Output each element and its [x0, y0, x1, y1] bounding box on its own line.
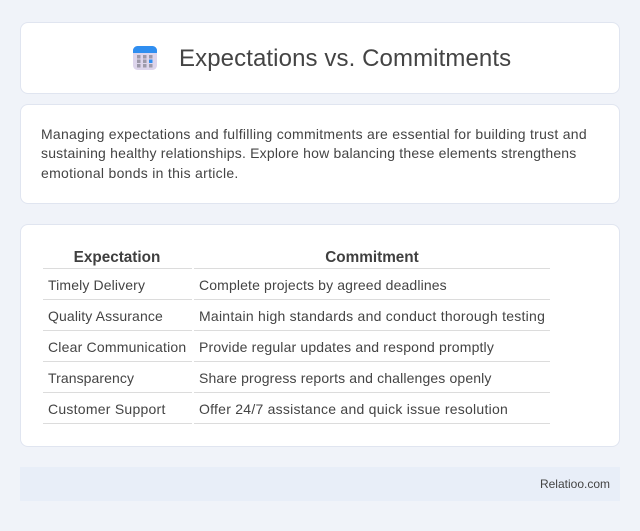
footer bar [20, 467, 620, 501]
row: Clear Communication: Clear Communication [48, 339, 186, 355]
text block: introduction: sustaining healthy relationships. Explore how balancing these elements strengthens [41, 145, 576, 161]
title: Expectations vs. Commitments [179, 45, 511, 72]
row: Quality Assurance: Quality Assurance [48, 308, 163, 324]
row detail: Transparency: Share progress reports and challenges openly [199, 370, 492, 386]
footer credit: Relatioo.com [540, 477, 610, 491]
table header: Commitment: Commitment [325, 249, 419, 266]
row detail: Quality Assurance: Maintain high standards and conduct thorough testing [199, 308, 545, 324]
text block: introduction: emotional bonds in this article. [41, 165, 239, 181]
row: Customer Support: Customer Support [48, 401, 166, 417]
icon: calendar [133, 46, 157, 70]
row: Transparency: Transparency [48, 370, 134, 386]
text block: introduction: Managing expectations and fulfilling commitments are essential for building trust and [41, 126, 587, 142]
panel: comparison table [20, 224, 620, 447]
table header: Expectation: Expectation [74, 249, 160, 266]
row detail: Customer Support: Offer 24/7 assistance and quick issue resolution [199, 401, 508, 417]
panel: title card [20, 22, 620, 94]
row: Timely Delivery: Timely Delivery [48, 277, 145, 293]
panel: introduction [20, 104, 620, 204]
row detail: Clear Communication: Provide regular updates and respond promptly [199, 339, 494, 355]
text block: introduction [41, 126, 587, 181]
row detail: Timely Delivery: Complete projects by agreed deadlines [199, 277, 447, 293]
